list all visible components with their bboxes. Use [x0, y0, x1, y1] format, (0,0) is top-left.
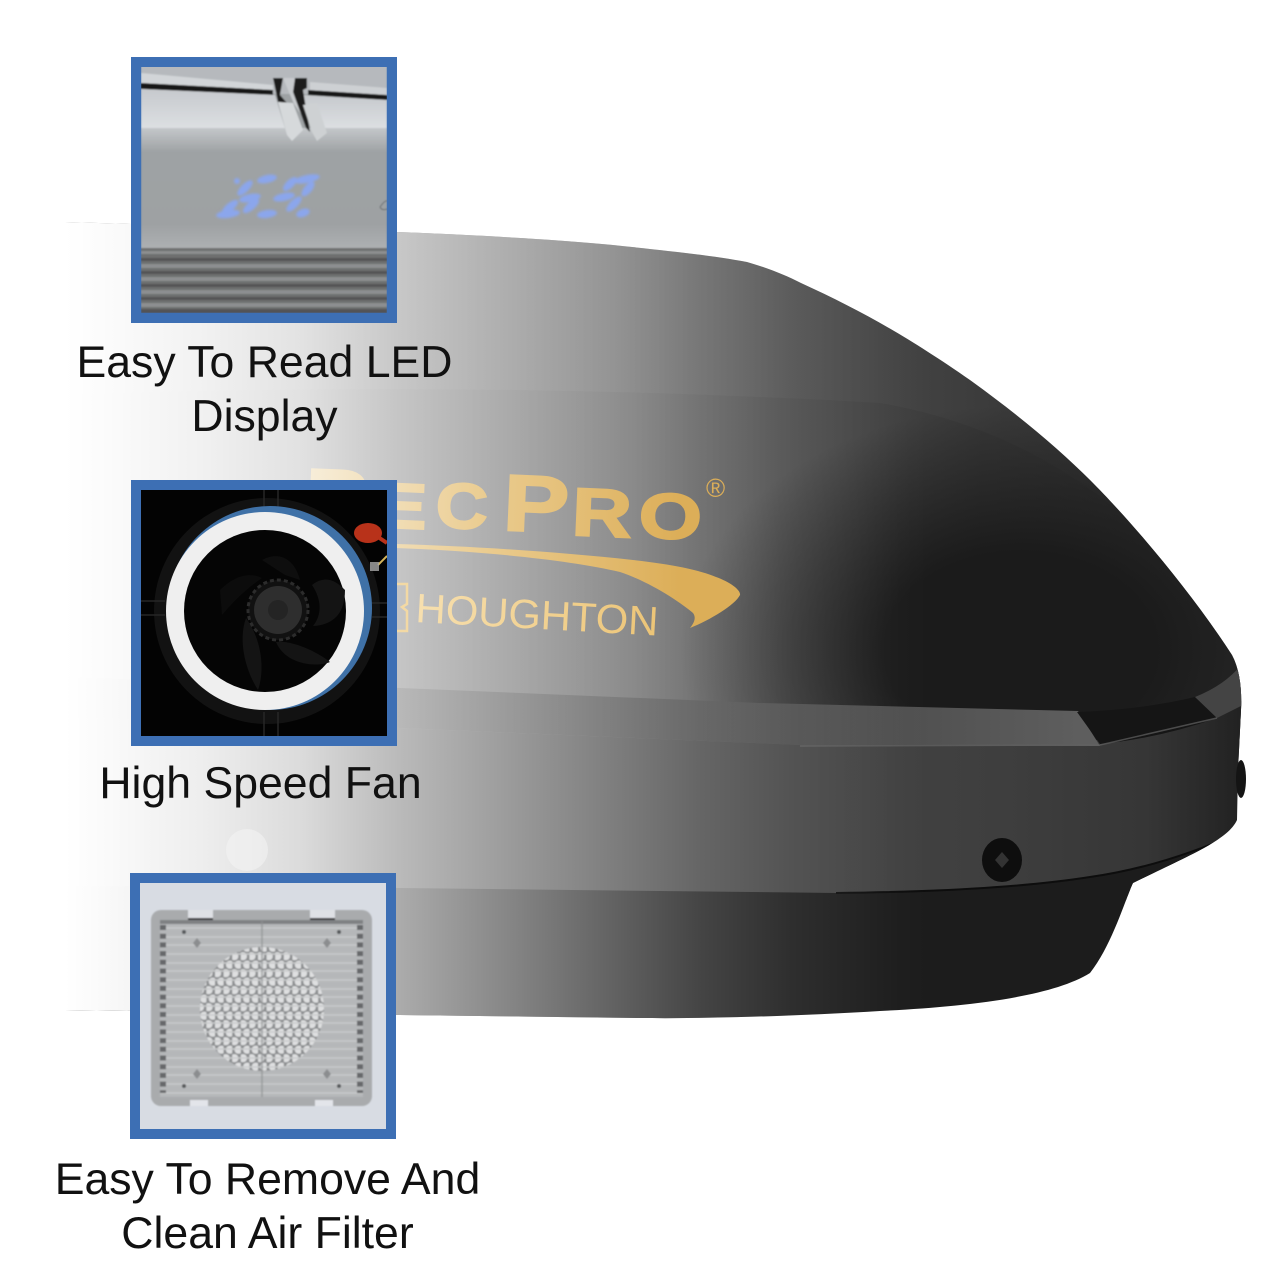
fan blades: [242, 556, 345, 690]
panel: LED display inset: [131, 57, 397, 323]
logo: RecPro Houghton: O: [637, 479, 703, 554]
logo: RecPro Houghton: C: [434, 469, 489, 543]
logo: RecPro Houghton: E: [375, 469, 428, 543]
caption: high speed fan: High Speed Fan: [99, 759, 422, 808]
LED digits: [216, 172, 321, 220]
side screw: [1236, 760, 1246, 798]
logo: RecPro Houghton: HOUGHTON: [414, 585, 660, 645]
caption: air filter: Clean Air Filter: [121, 1209, 414, 1258]
caption: LED display: [77, 338, 452, 441]
faint dome highlight: [226, 829, 268, 871]
logo: RecPro Houghton: R: [303, 452, 371, 544]
mesh circle: [200, 947, 324, 1071]
screw: [982, 838, 1022, 882]
logo: RecPro Houghton: P: [501, 458, 571, 550]
logo: RecPro Houghton: [303, 452, 740, 645]
filter slats: [160, 928, 363, 1093]
product: rooftop AC shell: [60, 215, 1250, 1030]
caption: air filter: Easy To Remove And: [55, 1155, 480, 1204]
caption: LED display: Easy To Read LED: [77, 338, 452, 387]
panel: high speed fan inset: [131, 480, 397, 746]
caption: air filter: [55, 1155, 480, 1258]
logo: RecPro Houghton: R: [570, 474, 634, 552]
red connector: [354, 523, 382, 543]
panel: air filter inset: [130, 873, 396, 1139]
white fade over product: [65, 222, 861, 1018]
logo: RecPro Houghton: ®: [706, 473, 725, 503]
caption: LED display: Display: [191, 392, 338, 441]
